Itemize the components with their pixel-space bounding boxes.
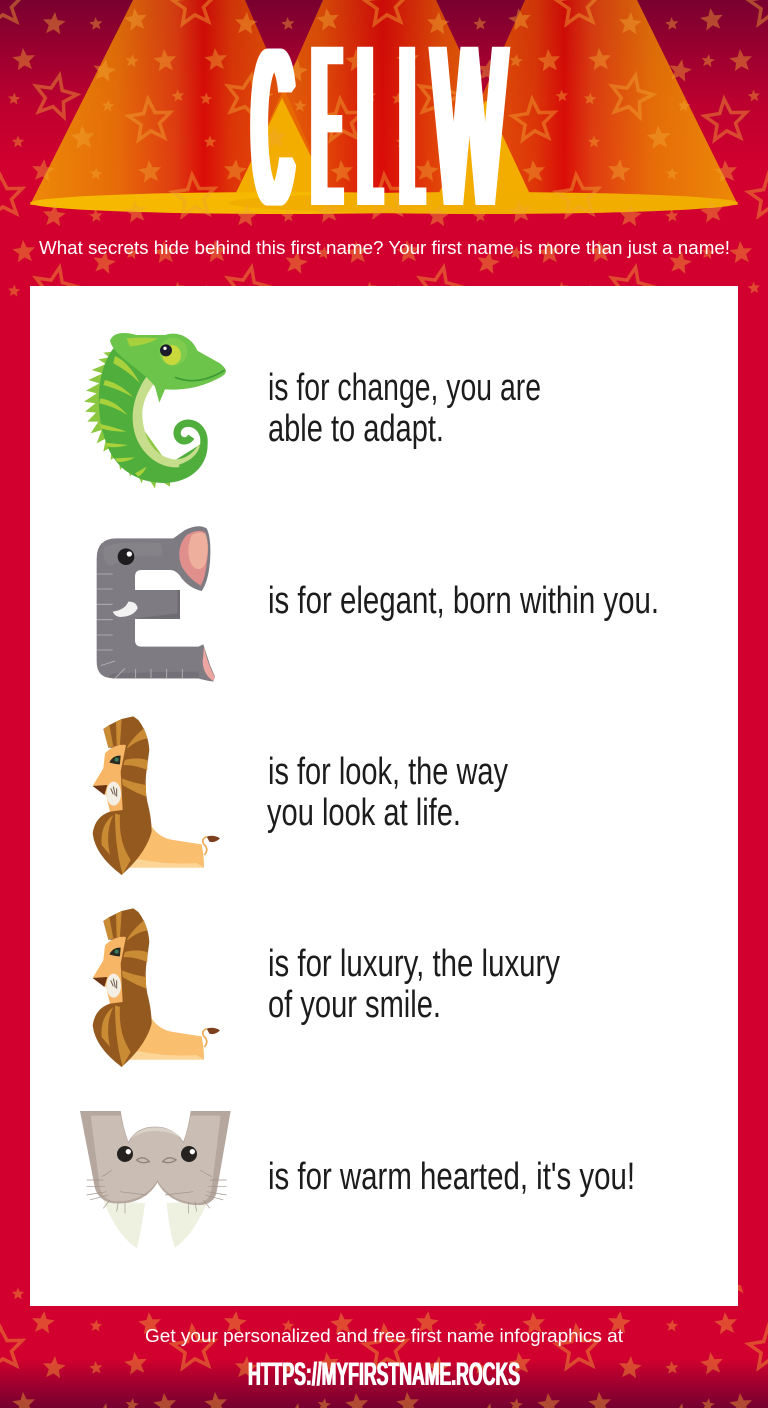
footer text: Get your personalized and free first name infographics at [145, 1326, 623, 1346]
text: C line: is for change, you are [268, 367, 541, 409]
icon: elephant letter E [97, 526, 215, 682]
icon: chameleon letter C [84, 333, 226, 488]
tusk [113, 602, 138, 617]
eye [118, 548, 134, 565]
title [254, 0, 505, 255]
trunk tip [203, 647, 215, 681]
text: W line: is for warm hearted, it's you! [268, 1156, 635, 1198]
text: L line: is for look, the way [268, 751, 508, 793]
text: L line [267, 751, 508, 834]
nostrils [137, 1158, 176, 1163]
icon: lion letter L second [93, 908, 220, 1067]
text: E line: is for elegant, born within you. [268, 580, 659, 622]
title: E [315, 0, 339, 254]
footer url: HTTPS://MYFIRSTNAME.ROCKS [248, 1356, 520, 1392]
title: L [403, 0, 421, 254]
text: C line [268, 367, 541, 450]
text: L line: you look at life. [267, 792, 461, 834]
subtitle: What secrets hide behind this first name? Your first name is more than just a name! [39, 238, 730, 258]
text: L line second: is for luxury, the luxury [268, 943, 560, 985]
white panel [30, 286, 738, 1306]
text: C line: able to adapt. [268, 408, 444, 450]
icon: lion letter L [93, 716, 220, 875]
text: L line second [268, 943, 560, 1026]
eyes [117, 1146, 133, 1162]
whiskers [87, 1170, 227, 1213]
title: W [434, 0, 505, 255]
title: C [254, 4, 292, 252]
title: L [361, 0, 379, 254]
ear [179, 531, 208, 586]
icon: walrus letter W [80, 1111, 231, 1248]
text: L line second: of your smile. [268, 984, 441, 1026]
spotlights [30, 0, 738, 214]
